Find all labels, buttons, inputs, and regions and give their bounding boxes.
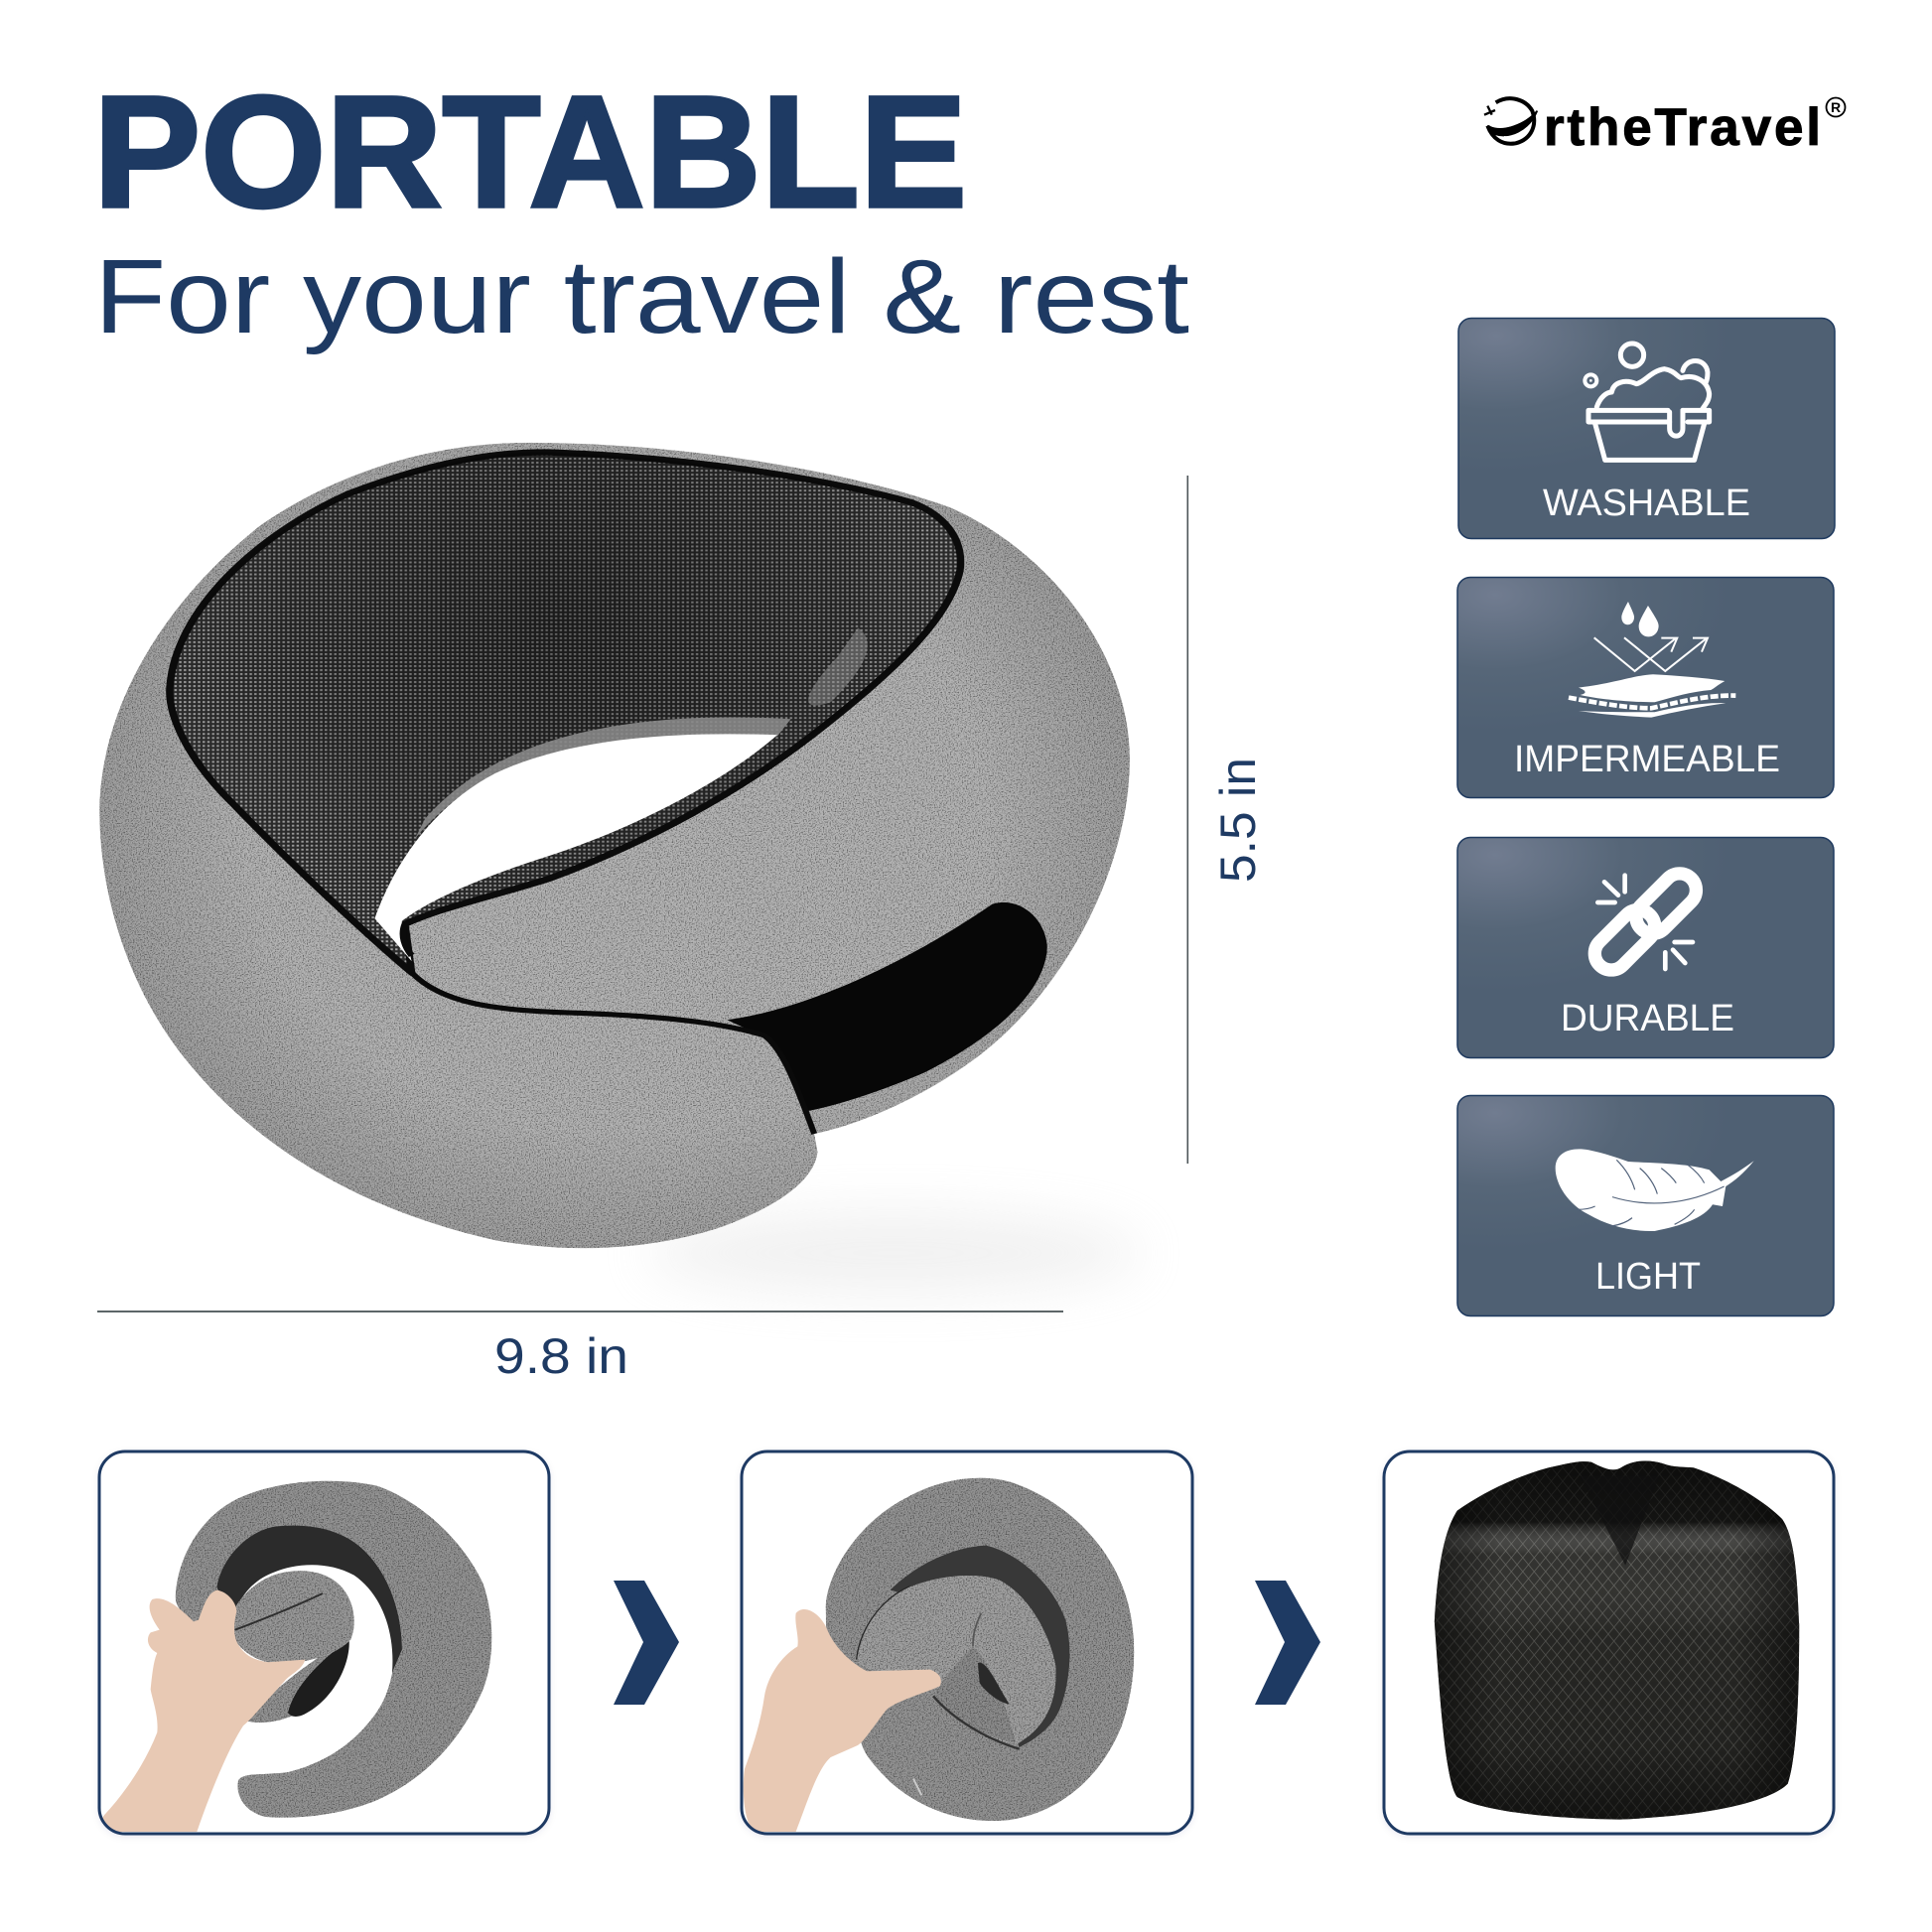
hand xyxy=(744,1609,941,1832)
dimension line: height xyxy=(1187,476,1188,1164)
rolled end xyxy=(228,1571,354,1664)
logo wordmark: rtheTravel xyxy=(1544,98,1821,157)
pillow inner roll xyxy=(857,1576,1056,1744)
panel: step 1, rolling the pillow xyxy=(99,1451,549,1834)
hand xyxy=(102,1590,305,1832)
feature card: durable xyxy=(1457,838,1834,1058)
dark band xyxy=(891,1546,1069,1747)
label: IMPERMEABLE xyxy=(1514,739,1780,780)
label: DURABLE xyxy=(1561,998,1734,1039)
brand logo xyxy=(1484,97,1845,157)
icon: chain link xyxy=(1587,867,1703,977)
icon: water repellent layers xyxy=(1569,602,1735,718)
main product image: neck pillow xyxy=(99,443,1130,1248)
pillow shadow xyxy=(645,1213,1142,1293)
black strap pad xyxy=(727,902,1047,1111)
lighter inner rim of mesh xyxy=(415,717,791,839)
label: LIGHT xyxy=(1595,1256,1701,1298)
arrow: step 2 to step 3 xyxy=(1255,1581,1320,1705)
dimension line: width xyxy=(97,1311,1063,1312)
icon: feather xyxy=(1556,1149,1754,1231)
front flap piping xyxy=(412,973,814,1134)
feature card: washable xyxy=(1458,318,1835,538)
registered mark: R xyxy=(1831,99,1841,115)
dimension label: 5.5 in: 5.5 in xyxy=(1210,758,1266,883)
black mesh bag xyxy=(1435,1461,1799,1820)
panel: step 2, rolled pillow xyxy=(742,1451,1192,1834)
arrow: step 1 to step 2 xyxy=(614,1581,679,1705)
label: WASHABLE xyxy=(1543,483,1750,524)
feature card: impermeable xyxy=(1457,578,1834,798)
title: PORTABLE xyxy=(93,63,967,240)
black inner band xyxy=(216,1526,402,1673)
panel: step 3, mesh storage bag xyxy=(1384,1451,1834,1834)
pillow outer coil xyxy=(826,1478,1134,1821)
dimension label: 9.8 in: 9.8 in xyxy=(494,1328,628,1384)
icon: wash basin xyxy=(1585,344,1710,460)
pillow spiral xyxy=(176,1481,491,1818)
mesh interior xyxy=(170,453,961,973)
icon: globe with plane xyxy=(1484,98,1537,144)
feature card: light xyxy=(1457,1096,1834,1316)
subtitle: For your travel & rest xyxy=(94,238,1189,355)
registered mark xyxy=(1827,97,1845,117)
neck opening xyxy=(374,734,777,961)
right body black piping tip xyxy=(403,736,811,955)
